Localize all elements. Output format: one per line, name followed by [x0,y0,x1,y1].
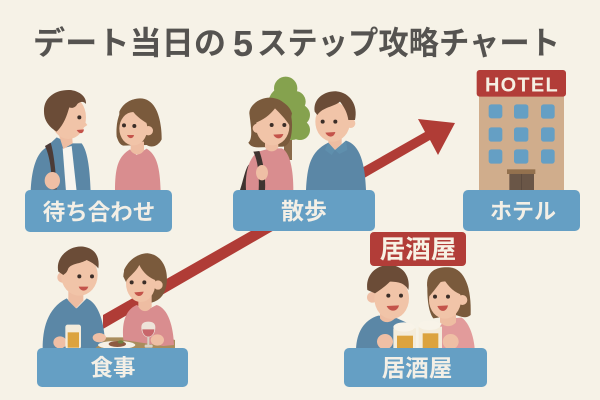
man with backpack [31,90,91,192]
title: ステップ攻略チャート [257,25,560,61]
label: 食事 [37,348,188,387]
label: 散歩: 散歩 [281,198,327,224]
title: デート当日の [33,25,226,61]
label: 待ち合わせ [25,190,172,232]
food plate [98,340,135,349]
hotel sign: HOTEL [485,75,558,97]
label: ホテル [463,190,580,231]
man with beer mug [356,265,409,349]
label: ホテル: ホテル [490,199,556,224]
label: 散歩 [233,190,375,231]
woman with wine [123,253,174,348]
entrance door [507,169,535,191]
panel: dining couple [43,247,175,349]
windows [489,104,555,164]
title [33,23,560,64]
panel: izakaya couple [356,265,475,349]
woman with beer mug [427,267,475,349]
sign: 居酒屋 red: 居酒屋 [380,236,456,264]
table [77,337,175,348]
woman in pink [115,98,162,192]
label: 待ち合わせ: 待ち合わせ [43,200,155,225]
panel: hotel building [477,70,566,192]
clinking beer mugs [377,321,459,349]
sign: 居酒屋 red [370,232,466,266]
label: 居酒屋: 居酒屋 [382,355,452,381]
panel: waiting couple [31,90,162,192]
building [479,95,564,192]
label: 食事: 食事 [90,356,136,380]
tree [268,77,310,160]
woman with bag [240,98,293,190]
man with beer [43,247,106,349]
arrow: upward progress [103,119,455,329]
panel: walking couple [240,77,366,190]
title: 5 [233,23,253,64]
man in blue shirt [306,91,366,190]
label: 居酒屋 [344,348,487,387]
